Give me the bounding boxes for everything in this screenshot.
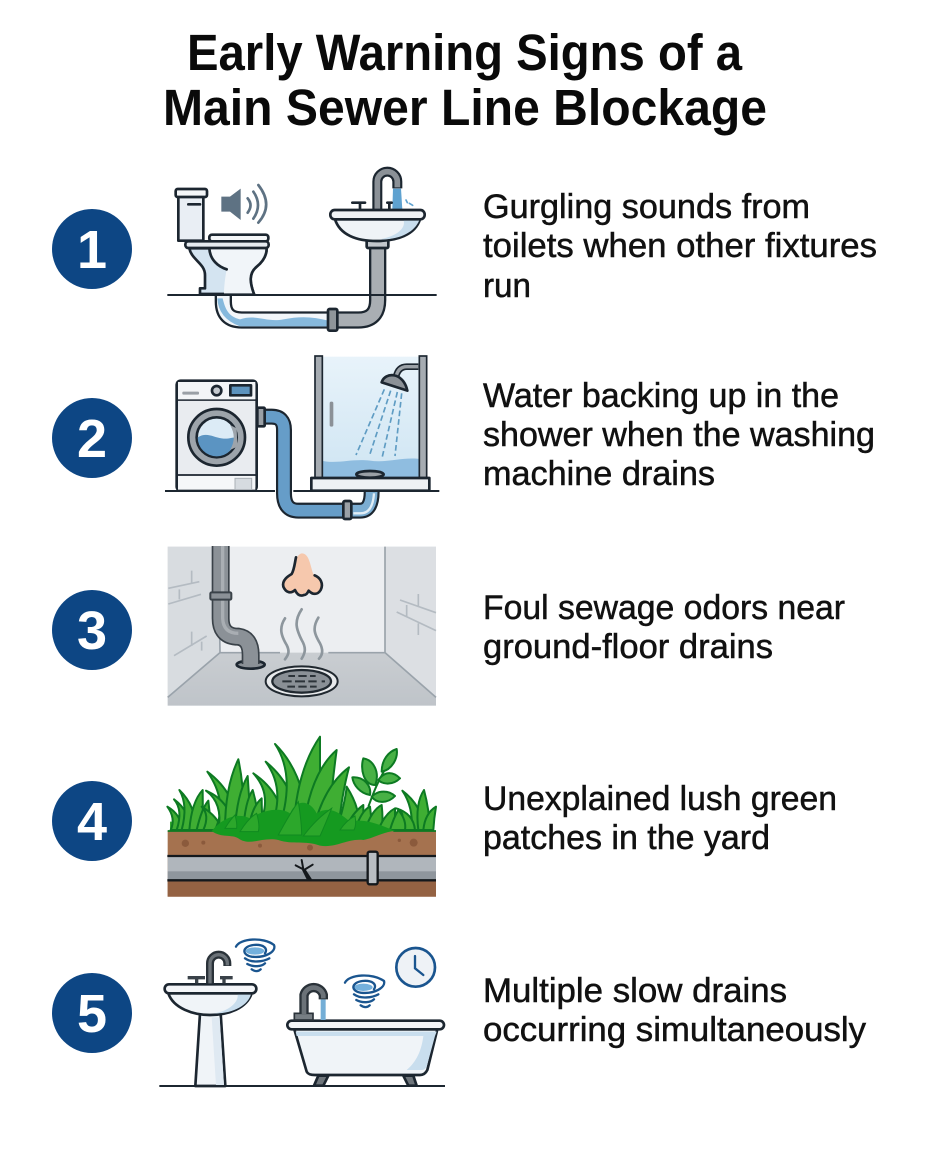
- title: [163, 24, 767, 136]
- title: Main Sewer Line Blockage: [163, 79, 767, 136]
- panel: sign 4 lush green patches: [52, 737, 837, 897]
- caption 1: run: [483, 267, 531, 305]
- caption 4: [483, 780, 837, 857]
- panel: sign 5 multiple slow drains: [52, 940, 866, 1086]
- illustration: basement room with pipe, nose, odor and floor drain: [168, 546, 436, 706]
- number badge 3: 3: [77, 601, 107, 661]
- caption 2: machine drains: [483, 455, 715, 493]
- panel: sign 2 water backing up: [52, 356, 875, 519]
- caption 5: occurring simultaneously: [483, 1011, 866, 1049]
- caption 2: shower when the washing: [483, 416, 875, 454]
- illustration: pedestal sink, bathtub, swirls and clock: [159, 940, 445, 1086]
- number badge 5: [52, 973, 132, 1053]
- number badge 2: [52, 398, 132, 478]
- panel: sign 1 gurgling toilets: [52, 172, 877, 331]
- leafy sprig: [352, 749, 400, 807]
- number badge 1: 1: [77, 220, 107, 280]
- number badge 2: 2: [77, 409, 107, 469]
- caption 4: patches in the yard: [483, 819, 770, 857]
- caption 1: Gurgling sounds from: [483, 188, 810, 226]
- caption 4: Unexplained lush green: [483, 780, 837, 818]
- caption 3: [483, 589, 845, 666]
- number badge 4: 4: [77, 792, 107, 852]
- caption 2: Water backing up in the: [483, 377, 839, 415]
- illustration: grass above soil and cracked pipe: [167, 737, 436, 897]
- caption 5: Multiple slow drains: [483, 972, 787, 1010]
- illustration: toilet, speaker and sink with shared drain pipe: [167, 172, 437, 331]
- illustration: washing machine draining into shower: [165, 356, 439, 519]
- panel: sign 3 sewage odors: [52, 546, 845, 706]
- number badge 4: [52, 781, 132, 861]
- caption 5: [483, 972, 866, 1049]
- grass blades: [167, 737, 436, 830]
- caption 1: toilets when other fixtures: [483, 227, 877, 265]
- grass base: [170, 822, 433, 831]
- caption 2: [483, 377, 875, 493]
- caption 3: Foul sewage odors near: [483, 589, 845, 627]
- caption 1: [483, 188, 877, 305]
- number badge 1: [52, 209, 132, 289]
- number badge 3: [52, 590, 132, 670]
- caption 3: ground-floor drains: [483, 628, 773, 666]
- title: Early Warning Signs of a: [187, 24, 743, 81]
- number badge 5: 5: [77, 984, 107, 1044]
